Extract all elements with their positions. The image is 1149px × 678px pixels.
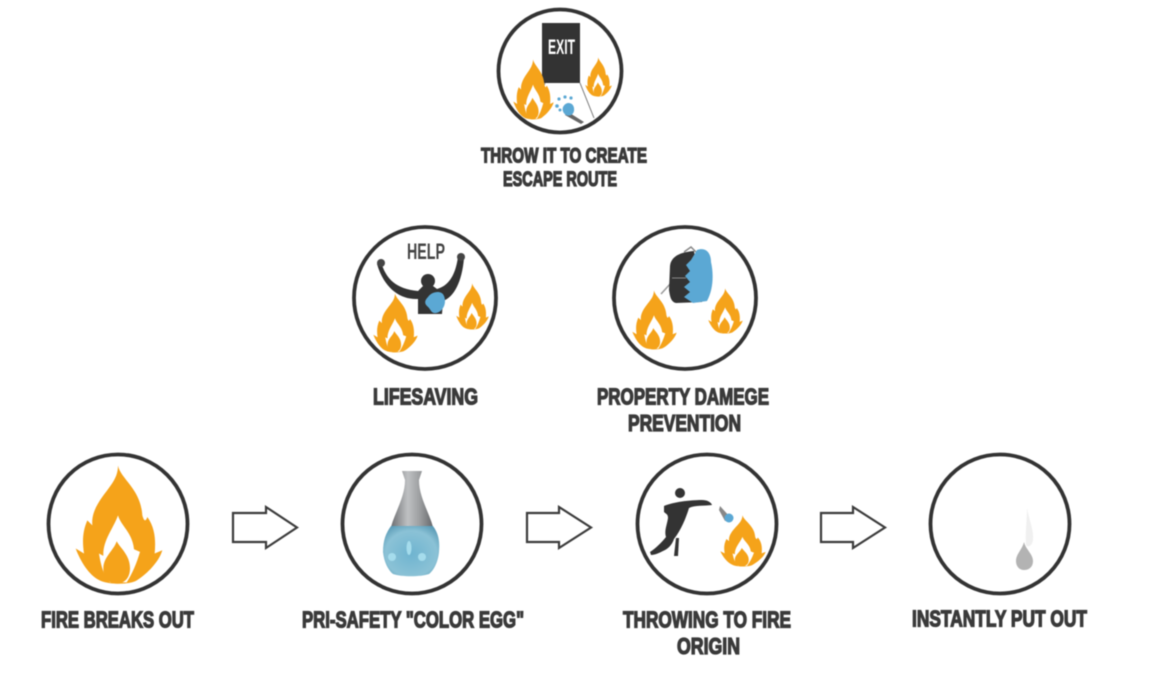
label: pri-safety color egg: PRI-SAFETY "COLOR EGG" [302,606,524,632]
icon: person calling for help between flames: HELP [407,239,445,264]
panel: property damage prevention [597,227,769,436]
icon: color egg bottle [342,454,482,594]
step: fire breaks out [41,454,194,632]
icon: large flame [48,454,188,594]
arrow: step 3 to step 4 [821,507,885,548]
step: instantly put out [912,454,1087,632]
step: color egg [302,454,524,632]
label: fire breaks out: FIRE BREAKS OUT [41,606,194,632]
label: lifesaving: LIFESAVING [373,384,478,410]
panel: lifesaving [354,227,496,410]
arrow: step 1 to step 2 [233,507,297,548]
label: instantly put out: INSTANTLY PUT OUT [912,606,1087,632]
label: property damege: PROPERTY DAMEGE [597,384,769,410]
icon: exit door with flames [498,10,622,132]
label: throw it to create: THROW IT TO CREATE [481,144,647,168]
label: escape route: ESCAPE ROUTE [503,168,617,191]
arrow: step 2 to step 3 [527,507,591,548]
panel: throw it to create escape route [481,10,647,191]
label: origin: ORIGIN [677,633,740,659]
icon: backpack coated with blue foam between flames [614,227,756,369]
icon: person calling for help between flames [354,227,496,369]
icon: figure throwing bottle at flame [638,454,776,594]
label: throwing to fire: THROWING TO FIRE [623,606,791,632]
label: prevention: PREVENTION [628,410,741,436]
step: throwing to fire origin [623,454,791,659]
icon: exit door with flames: EXIT [548,36,575,59]
icon: fading smoke drop [930,454,1070,594]
